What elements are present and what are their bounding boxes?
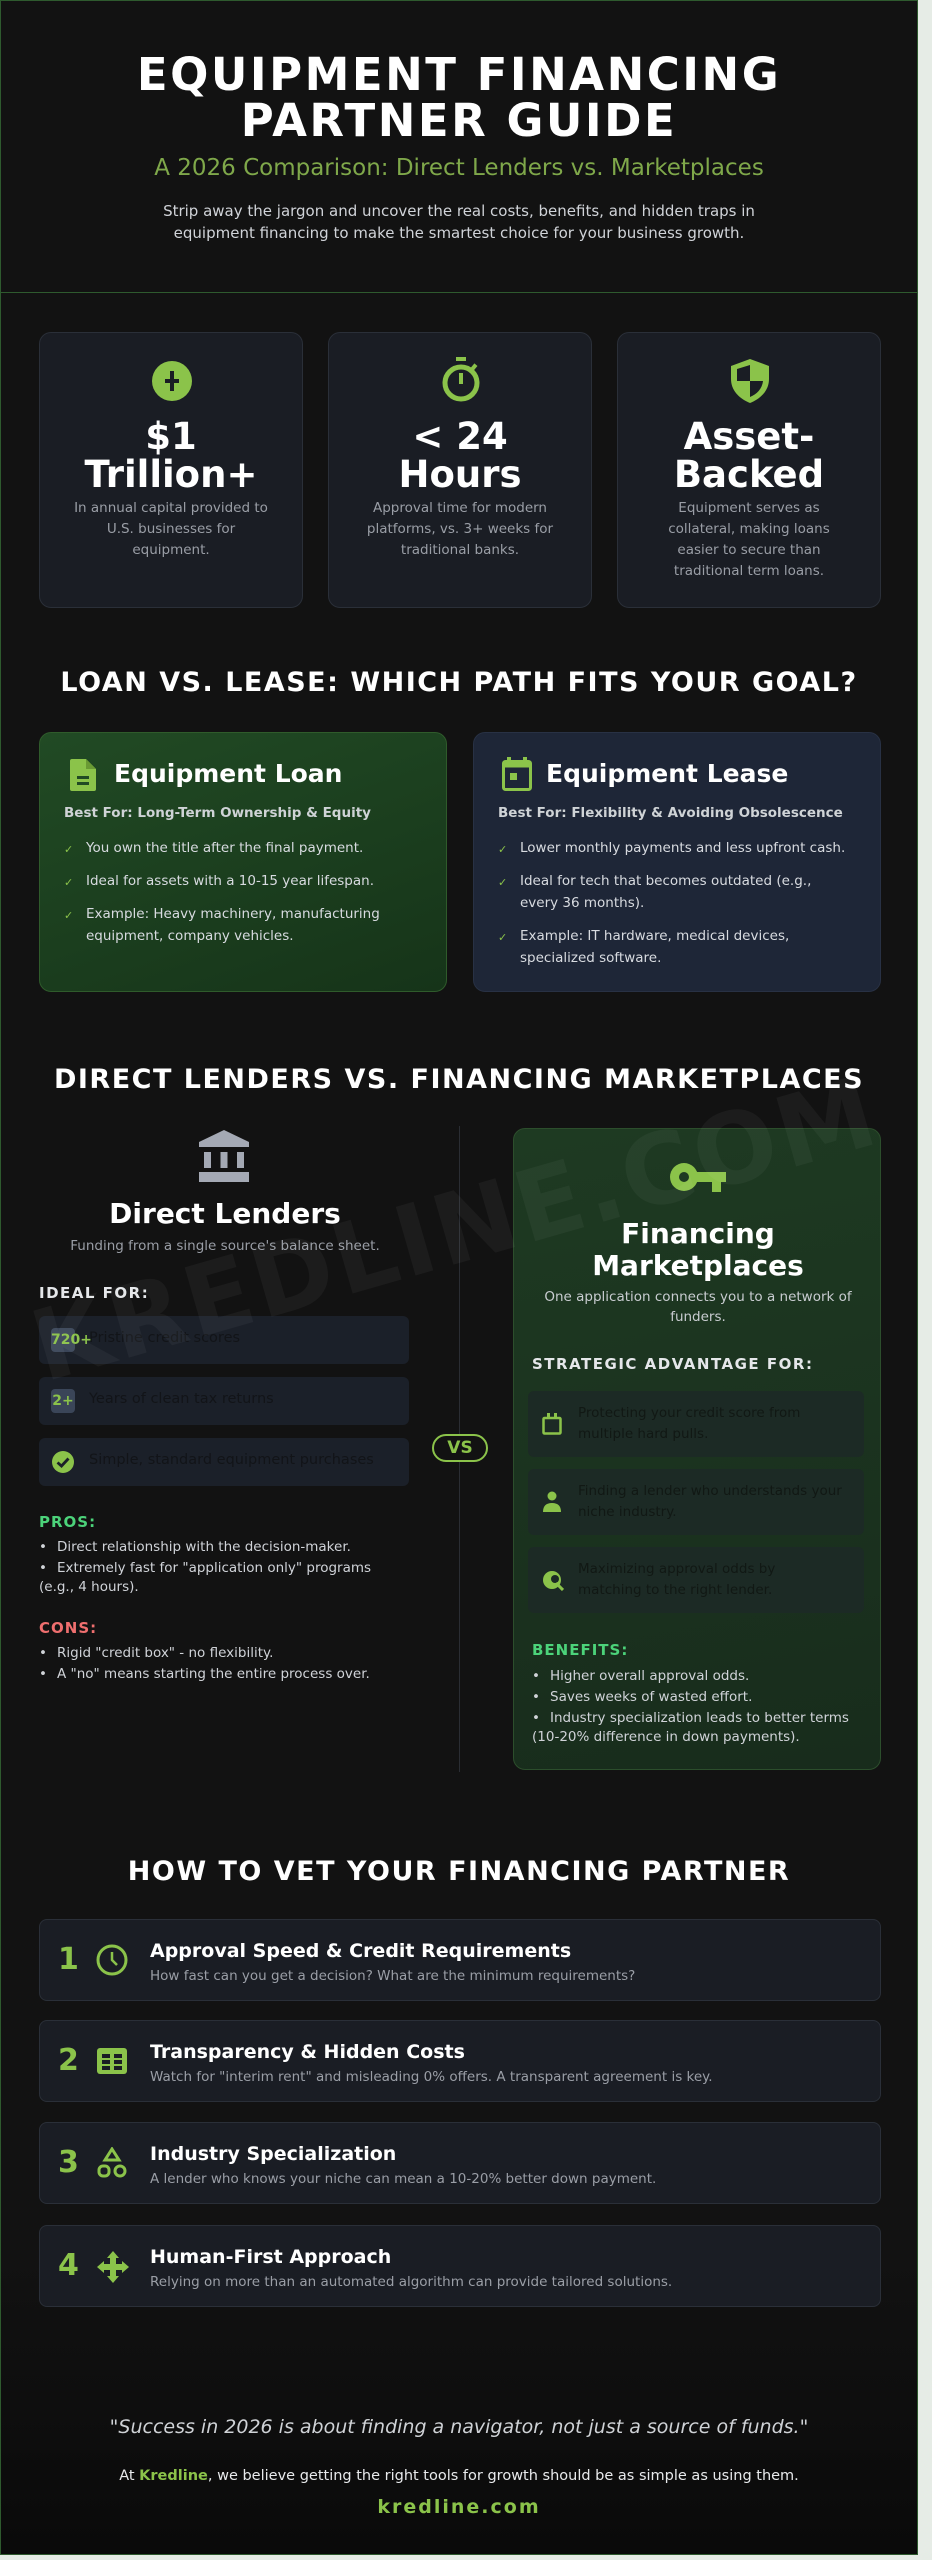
checklist: specialized software. xyxy=(520,950,661,966)
panel: financing marketplaces: Saves weeks of wasted effort. xyxy=(550,1689,752,1705)
stat value: Asset- xyxy=(684,415,814,458)
benefits: BENEFITS: xyxy=(532,1641,628,1659)
pros: PROS: xyxy=(39,1513,96,1531)
stat card: asset xyxy=(617,332,881,608)
title xyxy=(137,48,781,147)
advantage 3: Maximizing approval odds by xyxy=(578,1561,775,1577)
title xyxy=(592,1217,804,1282)
strategic label: STRATEGIC ADVANTAGE FOR: xyxy=(532,1355,813,1373)
vet item 3 xyxy=(39,2122,881,2204)
panel title: Equipment Loan xyxy=(114,759,342,788)
panel: direct lenders xyxy=(39,1130,380,1302)
vet item 4: 4 xyxy=(58,2248,79,2283)
cons xyxy=(39,1619,370,1682)
best for: Best For: Flexibility & Avoiding Obsolescence xyxy=(498,805,843,821)
quote: "Success in 2026 is about finding a navigator, not just a source of funds." xyxy=(110,2416,808,2438)
vet item 1: 1 xyxy=(58,1942,79,1977)
panel: financing marketplaces: Industry specialization leads to better terms xyxy=(550,1710,849,1726)
title: Financing xyxy=(621,1217,775,1250)
text: A "no" means starting the entire process over. xyxy=(57,1666,370,1682)
ideal item 2: 2+ xyxy=(52,1393,74,1409)
ideal item 3 xyxy=(39,1438,409,1486)
ideal item 2 xyxy=(39,1377,409,1425)
icon: shapes xyxy=(98,2147,126,2178)
heading: loan vs lease: LOAN VS. LEASE: WHICH PATH FITS YOUR GOAL? xyxy=(60,667,858,698)
intro text: Strip away the jargon and uncover the real costs, benefits, and hidden traps in xyxy=(163,202,755,220)
stat card: hours xyxy=(328,332,592,608)
advantage 1: Protecting your credit score from multiple hard pulls. xyxy=(578,1405,800,1442)
stat value: < 24 xyxy=(412,415,508,458)
divider line xyxy=(459,1126,460,1772)
title: EQUIPMENT FINANCING xyxy=(137,48,781,101)
vet item 4 xyxy=(39,2225,881,2307)
advantage 2: Finding a lender who understands your niche industry. xyxy=(578,1483,842,1520)
checklist: You own the title after the final payment. xyxy=(86,840,363,856)
icon: clock xyxy=(96,1944,128,1976)
ideal item 1: 720+ xyxy=(51,1332,92,1348)
subtitle: Funding from a single source's balance sheet. xyxy=(70,1238,380,1254)
title: Marketplaces xyxy=(592,1249,804,1282)
title: Direct Lenders xyxy=(109,1197,341,1230)
stat value xyxy=(674,415,824,496)
vet item 1 xyxy=(39,1919,881,2001)
stat desc: In annual capital provided to U.S. businesses for equipment. xyxy=(74,500,268,558)
ideal for label: IDEAL FOR: xyxy=(39,1284,149,1302)
vet item 4: Human-First Approach xyxy=(150,2246,391,2268)
checklist xyxy=(500,840,845,966)
advantage 3 xyxy=(528,1547,864,1613)
advantage 1 xyxy=(528,1391,864,1457)
stat value xyxy=(398,415,522,496)
panel title: Equipment Lease xyxy=(546,759,788,788)
stat value: Trillion+ xyxy=(85,453,257,496)
vet item 2: Watch for "interim rent" and misleading 0% offers. A transparent agreement is key. xyxy=(150,2069,713,2085)
icon: stopwatch xyxy=(442,357,480,402)
icon: table xyxy=(97,2048,127,2074)
vs badge xyxy=(432,1434,488,1462)
footer url: kredline.com xyxy=(377,2496,541,2518)
panel: financing marketplaces: Higher overall approval odds. xyxy=(550,1668,749,1684)
vet item 2 xyxy=(39,2020,881,2102)
stat desc: Equipment serves as collateral, making loans easier to secure than traditional term loans. xyxy=(668,500,830,579)
intro text: equipment financing to make the smartest choice for your business growth. xyxy=(174,224,744,242)
text: Extremely fast for "application only" programs xyxy=(57,1560,371,1576)
panel: equipment lease xyxy=(473,732,881,992)
icon: calendar xyxy=(502,757,532,791)
icon: coin xyxy=(152,361,192,401)
intro text xyxy=(163,202,755,242)
text: Direct relationship with the decision-maker. xyxy=(57,1539,351,1555)
vet item 2: 2 xyxy=(58,2043,79,2078)
panel: equipment loan xyxy=(39,732,447,992)
vet item 4: Relying on more than an automated algorithm can provide tailored solutions. xyxy=(150,2274,672,2290)
cons: CONS: xyxy=(39,1619,97,1637)
panel: financing marketplaces xyxy=(513,1128,881,1770)
best for: Best For: Long-Term Ownership & Equity xyxy=(64,805,371,821)
text: (e.g., 4 hours). xyxy=(39,1579,139,1595)
ideal item 1: Pristine credit scores xyxy=(89,1330,240,1346)
title: PARTNER GUIDE xyxy=(241,94,677,147)
ideal item 2: Years of clean tax returns xyxy=(89,1391,274,1407)
footer text: At Kredline, we believe getting the right tools for growth should be as simple as using them. xyxy=(119,2468,799,2484)
icon: arrows xyxy=(97,2251,129,2283)
checklist: Example: Heavy machinery, manufacturing equipment, company vehicles. xyxy=(86,906,380,944)
checklist: Example: IT hardware, medical devices, xyxy=(520,928,789,944)
ideal item 3: Simple, standard equipment purchases xyxy=(89,1452,374,1468)
watermark: KREDLINE.COM xyxy=(20,1055,891,1405)
stat value xyxy=(84,415,257,496)
checklist xyxy=(66,840,380,944)
icon: document xyxy=(70,759,96,791)
checklist: Ideal for tech that becomes outdated (e.g., xyxy=(520,873,811,889)
checklist: Ideal for assets with a 10-15 year lifespan. xyxy=(86,873,374,889)
heading: how to vet: HOW TO VET YOUR FINANCING PARTNER xyxy=(128,1856,790,1887)
icon: shield xyxy=(731,359,769,403)
advantage 3: matching to the right lender. xyxy=(578,1582,772,1598)
ideal item 1 xyxy=(39,1316,409,1364)
desc: One application connects you to a network of funders. xyxy=(544,1289,852,1325)
stat card: trillion xyxy=(39,332,303,608)
text: Rigid "credit box" - no flexibility. xyxy=(57,1645,273,1661)
stat value: $1 xyxy=(145,415,197,458)
stat desc: Approval time for modern platforms, vs. 3+ weeks for traditional banks. xyxy=(367,500,553,558)
vet item 3: 3 xyxy=(58,2145,79,2180)
vet item 1: Approval Speed & Credit Requirements xyxy=(150,1940,571,1962)
checklist: Lower monthly payments and less upfront cash. xyxy=(520,840,845,856)
icon: bank xyxy=(199,1130,249,1182)
subtitle: A 2026 Comparison: Direct Lenders vs. Marketplaces xyxy=(154,155,764,181)
heading: direct lenders vs marketplaces: DIRECT LENDERS VS. FINANCING MARKETPLACES xyxy=(54,1064,864,1095)
panel: financing marketplaces: (10-20% difference in down payments). xyxy=(532,1729,800,1745)
advantage 2 xyxy=(528,1469,864,1535)
stat value: Backed xyxy=(674,453,824,496)
vet item 3: A lender who knows your niche can mean a 10-20% better down payment. xyxy=(150,2171,656,2187)
header xyxy=(1,1,917,293)
vet item 1: How fast can you get a decision? What are the minimum requirements? xyxy=(150,1968,635,1984)
vet item 2: Transparency & Hidden Costs xyxy=(150,2041,465,2063)
pros xyxy=(39,1513,371,1595)
vet item 3: Industry Specialization xyxy=(150,2143,396,2165)
stat value: Hours xyxy=(398,453,522,496)
vs badge: VS xyxy=(447,1438,473,1458)
checklist: every 36 months). xyxy=(520,895,644,911)
icon: key xyxy=(670,1163,726,1192)
